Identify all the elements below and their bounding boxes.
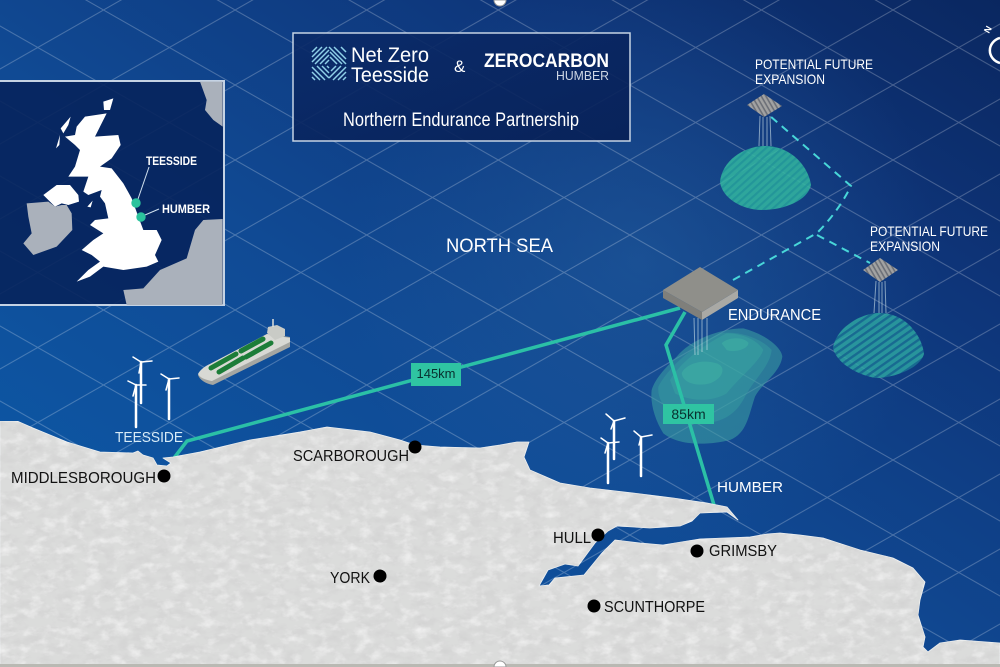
dome: [720, 146, 811, 210]
label: [870, 223, 988, 254]
logo text: Net Zero Teesside: Teesside: [351, 64, 429, 87]
icon: Net Zero Teesside knot: [312, 47, 346, 80]
panel: partnership logos: [293, 33, 630, 141]
wells: [874, 281, 886, 313]
label: EXPANSION: [755, 71, 825, 87]
dome: [833, 313, 924, 378]
label: [755, 56, 873, 87]
logo text: Net Zero Teesside: Net Zero: [351, 44, 429, 67]
panel: UK location inset map: [0, 81, 224, 305]
Endurance wells: [694, 318, 707, 355]
dashed expansion pipelines: [733, 116, 870, 280]
wind turbines: Humber: [601, 414, 652, 483]
wind turbines: Teesside: [128, 357, 179, 427]
land: English coast: [0, 421, 1000, 667]
wells: [759, 116, 771, 146]
town: Scarborough: [293, 440, 422, 465]
bottom edge strip: [0, 664, 1000, 667]
distance tag: 85km: 85km: [671, 406, 706, 422]
inset landmasses: [23, 82, 223, 305]
logo text: ZeroCarbon Humber: ZEROCARBON: [484, 51, 609, 72]
pipeline: Teesside to Endurance: [174, 308, 680, 458]
inset marker: Teesside: TEESSIDE: [146, 154, 197, 168]
platform: [747, 94, 782, 117]
town: Scarborough: SCARBOROUGH: [293, 448, 409, 465]
label: Humber: HUMBER: [717, 479, 783, 496]
Endurance reservoir: [651, 328, 782, 444]
selection handle: top: [494, 0, 506, 6]
inset marker: Humber: HUMBER: [162, 202, 210, 216]
label: POTENTIAL FUTURE: [755, 56, 873, 72]
town: Hull: HULL: [553, 530, 591, 547]
town: Grimsby: GRIMSBY: [709, 543, 777, 560]
inset marker: Humber: [136, 202, 210, 222]
town: York: YORK: [330, 570, 370, 587]
town: Scunthorpe: SCUNTHORPE: [604, 599, 705, 616]
selection handle: bottom: [494, 661, 506, 667]
icon: north arrow: [982, 24, 1000, 63]
distance tag: 145km: [411, 363, 461, 386]
label: EXPANSION: [870, 238, 940, 254]
logo text: ZeroCarbon Humber: HUMBER: [556, 68, 609, 83]
distance tag: 145km: 145km: [416, 366, 456, 381]
ampersand: &: [454, 57, 466, 76]
icon: north arrow: N: [982, 24, 994, 35]
ship: [198, 319, 290, 385]
expansion site east: [833, 223, 988, 378]
logo text: Net Zero Teesside: [351, 44, 429, 87]
inset marker: Teesside: [131, 154, 197, 208]
Endurance platform: [663, 267, 738, 320]
town: Middlesborough: MIDDLESBOROUGH: [11, 470, 156, 487]
distance tag: 85km: [663, 404, 714, 424]
partnership title: Northern Endurance Partnership: [343, 110, 579, 131]
label: North Sea: NORTH SEA: [446, 236, 553, 257]
pipeline: Humber to Endurance: [666, 312, 714, 505]
platform: [863, 258, 898, 282]
logo text: ZeroCarbon Humber: [484, 51, 609, 83]
label: Endurance: ENDURANCE: [728, 307, 821, 324]
label: Teesside: TEESSIDE: [115, 429, 183, 446]
expansion site north: [720, 56, 873, 210]
